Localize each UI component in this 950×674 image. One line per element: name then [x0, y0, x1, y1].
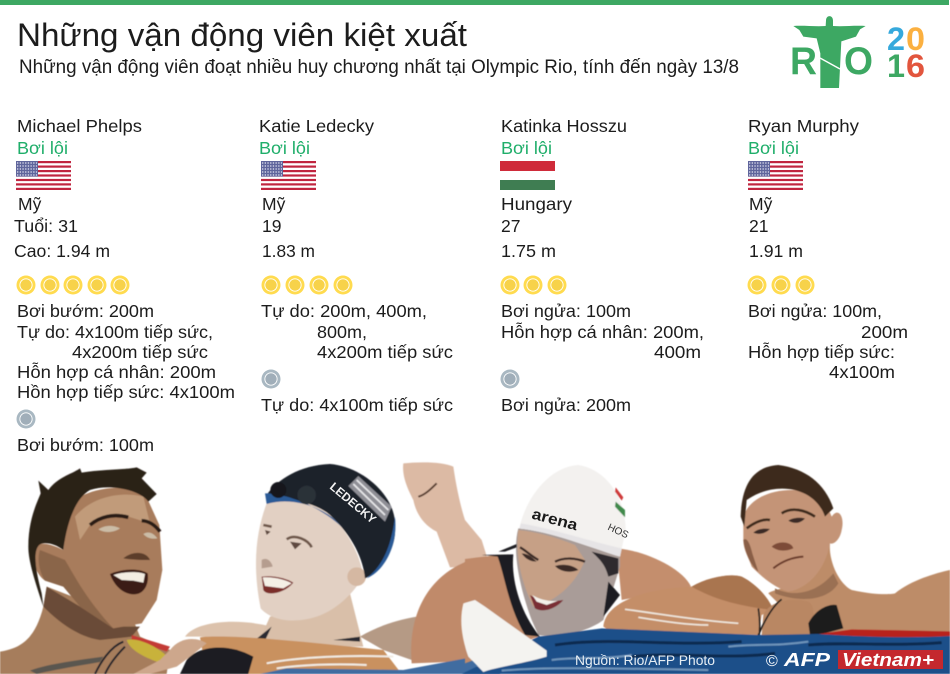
panel: Michael Phelps: Cao: 1.94 m [14, 241, 110, 261]
panel: Ryan Murphy: Ryan Murphy [748, 116, 859, 136]
panel: Michael Phelps: Tự do: 4x100m tiếp sức, [17, 322, 213, 342]
logo: Rio 2016 [790, 16, 925, 88]
black goggles [808, 605, 843, 635]
logo: Rio 2016: 6 [906, 48, 925, 84]
panel: Ryan Murphy: Mỹ [749, 194, 773, 214]
cap text [530, 506, 630, 541]
Ledecky mouth [262, 576, 293, 593]
panel: Katinka Hosszu: Katinka Hosszu [501, 116, 627, 136]
panel: Katinka Hosszu: 400m [654, 342, 701, 362]
panel: Katinka Hosszu: 1.75 m [501, 241, 556, 261]
panel: Michael Phelps: Bơi bướm: 100m [17, 435, 154, 455]
panel: Katie Ledecky: Tự do: 200m, 400m, [261, 301, 427, 321]
panel: Michael Phelps: Bơi lội [17, 138, 68, 158]
title: Những vận động viên kiệt xuất [17, 17, 467, 53]
panel: Katie Ledecky: 800m, [317, 322, 367, 342]
Ryan left arm [603, 575, 773, 635]
Phelps mouth [110, 570, 148, 594]
Hosszu right shoulder [617, 548, 691, 600]
Ledecky cap [267, 464, 395, 578]
panel: Ryan Murphy: Bơi ngửa: 100m, [748, 301, 882, 321]
water [462, 628, 950, 674]
cap text: arena [530, 506, 580, 534]
Vietnam+ logo: Vietnam+ [842, 650, 935, 670]
panel: Katie Ledecky: Katie Ledecky [259, 116, 374, 136]
copyright AFP [766, 650, 831, 670]
panel: Katie Ledecky: Mỹ [262, 194, 286, 214]
top green bar [0, 0, 949, 5]
swimsuit strap [255, 627, 360, 644]
panel: Ryan Murphy [748, 116, 908, 382]
Phelps brows and eyes [90, 516, 160, 532]
panel: Katinka Hosszu: Hungary [501, 194, 572, 214]
panel: Michael Phelps: Tuổi: 31 [14, 216, 78, 236]
copyright AFP: © [766, 653, 778, 670]
Hosszu fist and forearm [403, 462, 490, 567]
panel: Michael Phelps: Hỗn hợp cá nhân: 200m [17, 361, 216, 382]
panel: Michael Phelps: 4x200m tiếp sức [72, 342, 208, 362]
Phelps medal and goggles [132, 635, 170, 652]
logo: Rio 2016: R [790, 40, 817, 83]
panel: Ryan Murphy: Hỗn hợp tiếp sức: [748, 341, 895, 362]
panel: Michael Phelps: Michael Phelps [17, 116, 142, 136]
logo: Rio 2016: 2 [887, 21, 905, 57]
panel: Michael Phelps: Mỹ [18, 194, 42, 214]
Ledecky face [256, 499, 363, 621]
Ledecky front arm [200, 637, 402, 674]
panel: Katinka Hosszu: 27 [501, 216, 520, 236]
panel: Katinka Hosszu: Bơi lội [501, 138, 552, 158]
Hosszu left shoulder [465, 555, 538, 663]
red lane line [818, 629, 950, 637]
panel: Katinka Hosszu: Bơi ngửa: 100m [501, 301, 631, 321]
panel: Katie Ledecky [259, 116, 453, 415]
panel: Michael Phelps: Bơi bướm: 200m [17, 301, 154, 321]
Ryan brows eyes mouth [747, 510, 815, 528]
logo: Rio 2016: O [844, 40, 873, 83]
Hosszu face [516, 528, 620, 636]
panel: Ryan Murphy: 4x100m [829, 362, 895, 382]
panel: Katie Ledecky: Tự do: 4x100m tiếp sức [261, 395, 453, 415]
panel: Katinka Hosszu: Hỗn hợp cá nhân: 200m, [501, 321, 704, 342]
panel: Michael Phelps [14, 116, 235, 455]
white board [461, 600, 547, 672]
black goggles in hand [180, 647, 253, 674]
copyright AFP: AFP [783, 650, 831, 670]
panel: Ryan Murphy: Bơi lội [748, 138, 799, 158]
cap flag [348, 476, 392, 522]
Hosszu shoulder [411, 557, 500, 663]
panel: Ryan Murphy: 21 [749, 216, 768, 236]
Ryan hand [762, 600, 814, 635]
panel: Katie Ledecky: Bơi lội [259, 138, 310, 158]
panel: Katinka Hosszu [500, 116, 704, 415]
logo: Rio 2016: 0 [906, 21, 925, 57]
Phelps head [33, 488, 162, 628]
panel: Katinka Hosszu: Bơi ngửa: 200m [501, 395, 631, 415]
panel: Katie Ledecky: 1.83 m [262, 241, 315, 261]
flag: Hungary [500, 161, 555, 190]
panel: Ryan Murphy: 200m [861, 322, 908, 342]
source credit: Nguồn: Rio/AFP Photo [575, 652, 715, 668]
Ryan hair [741, 465, 833, 527]
Ledecky neck [257, 593, 363, 647]
Hosszu swimsuit [482, 544, 620, 637]
panel: Ryan Murphy: 1.91 m [749, 241, 803, 261]
logo: Rio 2016: 1 [887, 48, 905, 84]
panel: Katie Ledecky: 19 [262, 216, 281, 236]
cap name: LEDECKY: LEDECKY [327, 480, 379, 526]
subtitle: Những vận động viên đoạt nhiều huy chương nhất tại Olympic Rio, tính đến ngày 13/8 [19, 57, 739, 78]
Phelps body [0, 587, 170, 674]
Ledecky back arm [185, 622, 272, 642]
Phelps hair [28, 467, 157, 607]
photo: Katinka Hosszu and Ryan Murphy [461, 465, 950, 674]
photo: swimmers at the pool edge [0, 462, 950, 674]
water left [260, 657, 500, 674]
cap text: HOS [606, 522, 630, 541]
photo: Michael Phelps and Katie Ledecky [0, 462, 500, 674]
panel: Katie Ledecky: 4x200m tiếp sức [317, 342, 453, 362]
Ryan torso [768, 543, 950, 633]
Hosszu cap [519, 465, 626, 557]
Ryan head [743, 490, 843, 592]
panel: Michael Phelps: Hồn hợp tiếp sức: 4x100m [17, 382, 235, 402]
